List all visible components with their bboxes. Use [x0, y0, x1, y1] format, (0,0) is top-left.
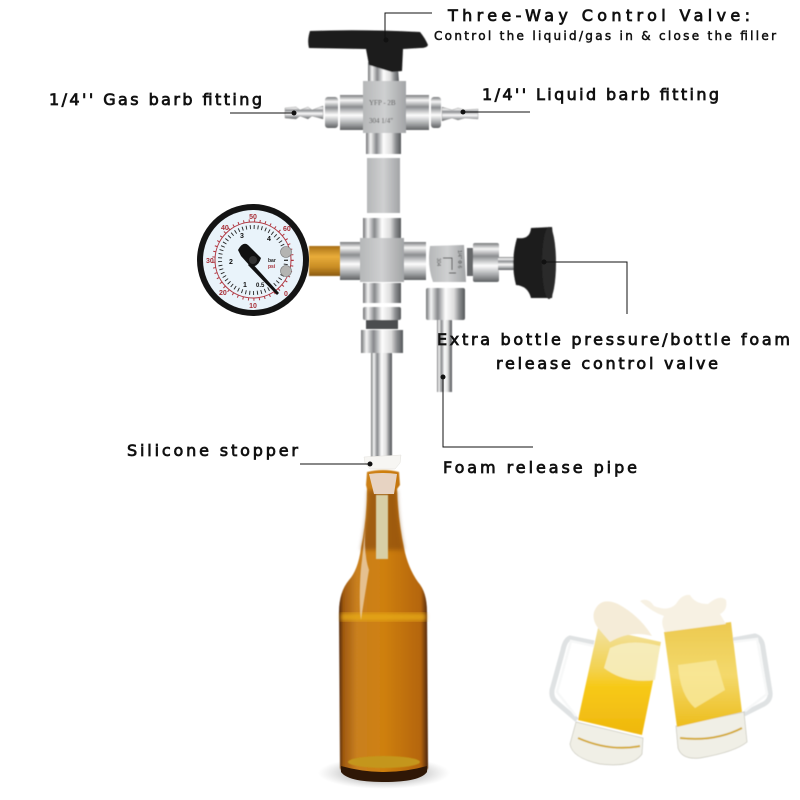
callout: foam release pipe — [440, 374, 637, 477]
right mug foam — [640, 595, 726, 632]
valve body: YFP - 2B — [369, 99, 396, 107]
gauge numbers: 1 — [243, 282, 247, 289]
liquid barb fitting — [442, 107, 478, 121]
glass highlight — [360, 510, 369, 620]
callout: foam release control valve: release control valve — [496, 354, 718, 373]
gauge numbers: 60 — [283, 226, 291, 233]
right stub — [403, 242, 426, 280]
gauge numbers: 40 — [221, 225, 229, 232]
inner tube — [376, 495, 388, 559]
center block — [360, 238, 404, 282]
gauge numbers: 0.5 — [256, 283, 265, 289]
gauge numbers — [206, 214, 291, 310]
gauge numbers: 0 — [284, 291, 288, 298]
gauge face — [203, 210, 303, 310]
gauge numbers: 2 — [229, 259, 233, 266]
valve handle — [308, 30, 428, 82]
upper nut — [363, 307, 401, 320]
callout: three-way control valve — [384, 6, 776, 43]
foam release pipe — [437, 320, 452, 392]
callout: silicone stopper — [127, 441, 372, 466]
dark neck tint — [361, 490, 404, 550]
gas barb fitting — [285, 106, 323, 119]
left mug base — [570, 722, 643, 765]
callout: gas barb fitting: 1/4'' Gas barb fitting — [49, 90, 262, 109]
valve elbow: 304 — [435, 258, 441, 267]
foam release control valve — [426, 227, 556, 392]
callout: foam release pipe: Foam release pipe — [443, 458, 637, 477]
gauge numbers: psi — [268, 264, 276, 270]
callout: three-way control valve: Control the liquid/gas in & close the filler — [434, 29, 776, 43]
callout: silicone stopper: Silicone stopper — [127, 441, 298, 460]
bottle shadow — [318, 757, 450, 789]
gauge numbers: 10 — [249, 303, 257, 310]
gauge numbers: 30 — [206, 258, 214, 265]
gauge needle — [238, 244, 279, 295]
right mug handle — [733, 636, 770, 714]
stopper inside neck — [369, 473, 397, 494]
callout: liquid barb fitting: 1/4'' Liquid barb fitting — [482, 85, 719, 104]
valve elbow — [429, 245, 466, 282]
lower collar — [363, 283, 401, 303]
clinking beer mugs — [552, 595, 770, 765]
beer bottle — [318, 455, 450, 789]
right mug beer — [664, 622, 742, 727]
valve stem — [498, 257, 514, 270]
lower nut — [426, 288, 465, 320]
red scale — [214, 220, 292, 300]
neck — [366, 320, 398, 329]
right mug base — [676, 712, 747, 758]
left mug handle — [552, 638, 594, 720]
valve body: 304 1/4" — [369, 117, 393, 125]
hex connector tube — [367, 158, 400, 213]
gauge numbers: 50 — [249, 214, 257, 221]
callout: liquid barb fitting — [460, 85, 719, 114]
left mug — [552, 601, 661, 765]
filler tube — [371, 353, 392, 457]
gauge numbers: 4 — [267, 236, 271, 243]
bottom glow — [348, 756, 420, 768]
three-way control valve assembly — [285, 30, 478, 213]
gauge numbers: 20 — [219, 290, 227, 297]
compression nut — [467, 248, 474, 276]
bottle glass — [339, 470, 428, 781]
pressure gauge — [197, 204, 341, 316]
left mug foam — [594, 601, 652, 642]
silicone stopper — [364, 455, 401, 469]
callout: three-way control valve: Three-Way Control Valve: — [447, 6, 750, 25]
valve body — [325, 81, 441, 154]
brass fitting — [309, 246, 341, 276]
left mug beer — [578, 628, 661, 735]
left stub — [340, 242, 361, 280]
right mug — [640, 595, 770, 758]
lower nut — [361, 330, 403, 353]
top collar — [363, 218, 401, 239]
callout: gas barb fitting — [49, 90, 296, 116]
callout: foam release control valve — [437, 260, 790, 373]
gauge numbers: 3 — [240, 233, 244, 240]
gauge case — [197, 204, 309, 316]
valve elbow: 1/4" Φ 6 — [456, 250, 462, 268]
gauge screws — [280, 246, 292, 276]
callout: foam release control valve: Extra bottle pressure/bottle foam — [437, 330, 790, 349]
bottle base — [341, 766, 427, 782]
cross fitting and filler tube — [340, 218, 426, 457]
gauge numbers: bar — [268, 258, 276, 264]
beer surface band — [341, 613, 426, 621]
knob — [513, 227, 556, 299]
